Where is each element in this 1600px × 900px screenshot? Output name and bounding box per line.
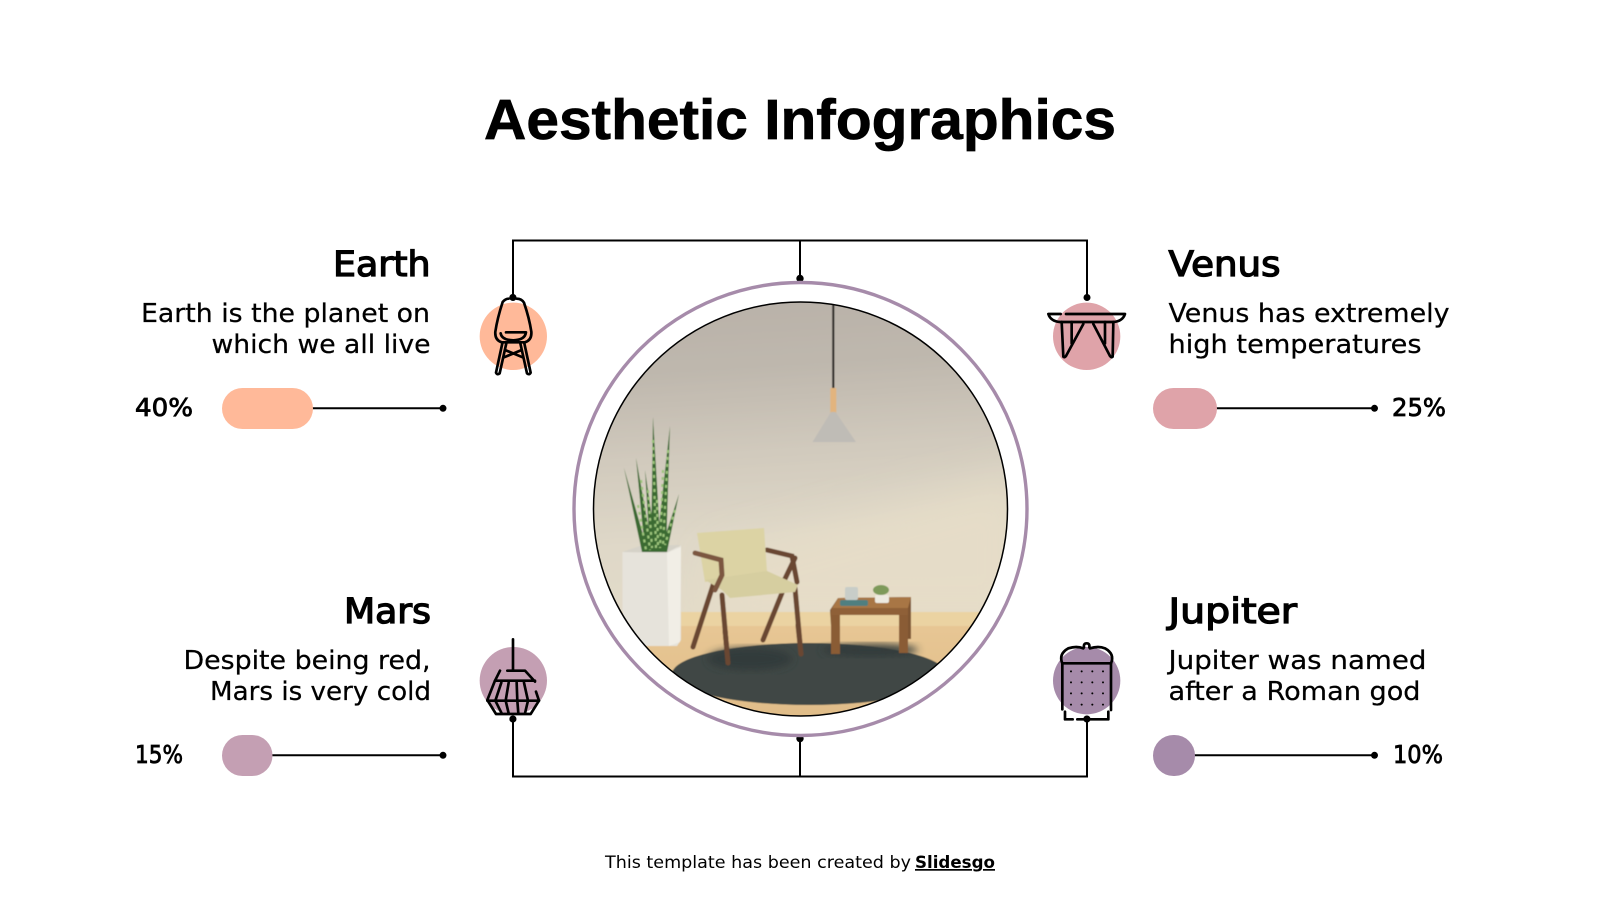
Venus description	[1168, 299, 1450, 360]
central ring	[574, 282, 1027, 736]
Mars description: Mars is very cold	[210, 677, 431, 707]
pendant lamp	[812, 298, 856, 442]
mug, book and small plant	[840, 585, 889, 606]
Mars description: Despite being red,	[184, 646, 430, 676]
icon: cushioned stool	[1053, 643, 1120, 722]
panel: Venus	[1048, 245, 1450, 429]
sunlight on wall	[715, 470, 1025, 625]
panel: Mars	[135, 592, 547, 776]
Earth heading: Earth	[333, 245, 430, 285]
Mars bar	[222, 735, 446, 776]
chair legs over rug	[725, 625, 801, 663]
Earth bar	[222, 388, 446, 429]
snake plant	[624, 417, 679, 552]
Earth description: which we all live	[212, 330, 430, 360]
Jupiter description: Jupiter was named	[1166, 646, 1426, 676]
icon: table	[1048, 303, 1125, 370]
footer credit: Slidesgo	[915, 853, 995, 873]
panel: Earth	[135, 245, 547, 429]
planter	[622, 545, 681, 646]
Jupiter description	[1166, 646, 1426, 707]
Venus heading: Venus	[1168, 245, 1280, 285]
Venus description: Venus has extremely	[1168, 299, 1450, 329]
Jupiter heading: Jupiter	[1166, 592, 1298, 632]
Earth description: Earth is the planet on	[141, 299, 430, 329]
Mars heading: Mars	[344, 592, 431, 632]
Earth description	[141, 299, 430, 360]
panel: Jupiter	[1053, 592, 1443, 776]
title: Aesthetic Infographics	[484, 88, 1116, 152]
room photo	[590, 298, 1025, 722]
side table	[830, 597, 911, 654]
icon: chair	[480, 294, 547, 374]
photo outline	[594, 302, 1008, 716]
Jupiter bar	[1153, 735, 1378, 776]
Jupiter description: after a Roman god	[1168, 677, 1420, 707]
Jupiter percentage: 10%	[1393, 740, 1443, 769]
icon: pendant basket lamp	[480, 639, 547, 722]
baseboard	[682, 612, 978, 626]
Earth percentage: 40%	[135, 393, 193, 422]
connector frame: top	[510, 240, 1090, 301]
Mars percentage: 15%	[135, 740, 183, 769]
chair	[693, 528, 801, 663]
footer credit: This template has been created by	[604, 853, 911, 873]
wall	[590, 298, 1012, 628]
connector frame: bottom	[510, 716, 1090, 776]
Venus description: high temperatures	[1168, 330, 1422, 360]
Mars description	[184, 646, 431, 707]
rug	[672, 643, 946, 705]
Venus bar	[1153, 388, 1378, 429]
Venus percentage: 25%	[1392, 393, 1446, 422]
floor	[622, 612, 970, 716]
